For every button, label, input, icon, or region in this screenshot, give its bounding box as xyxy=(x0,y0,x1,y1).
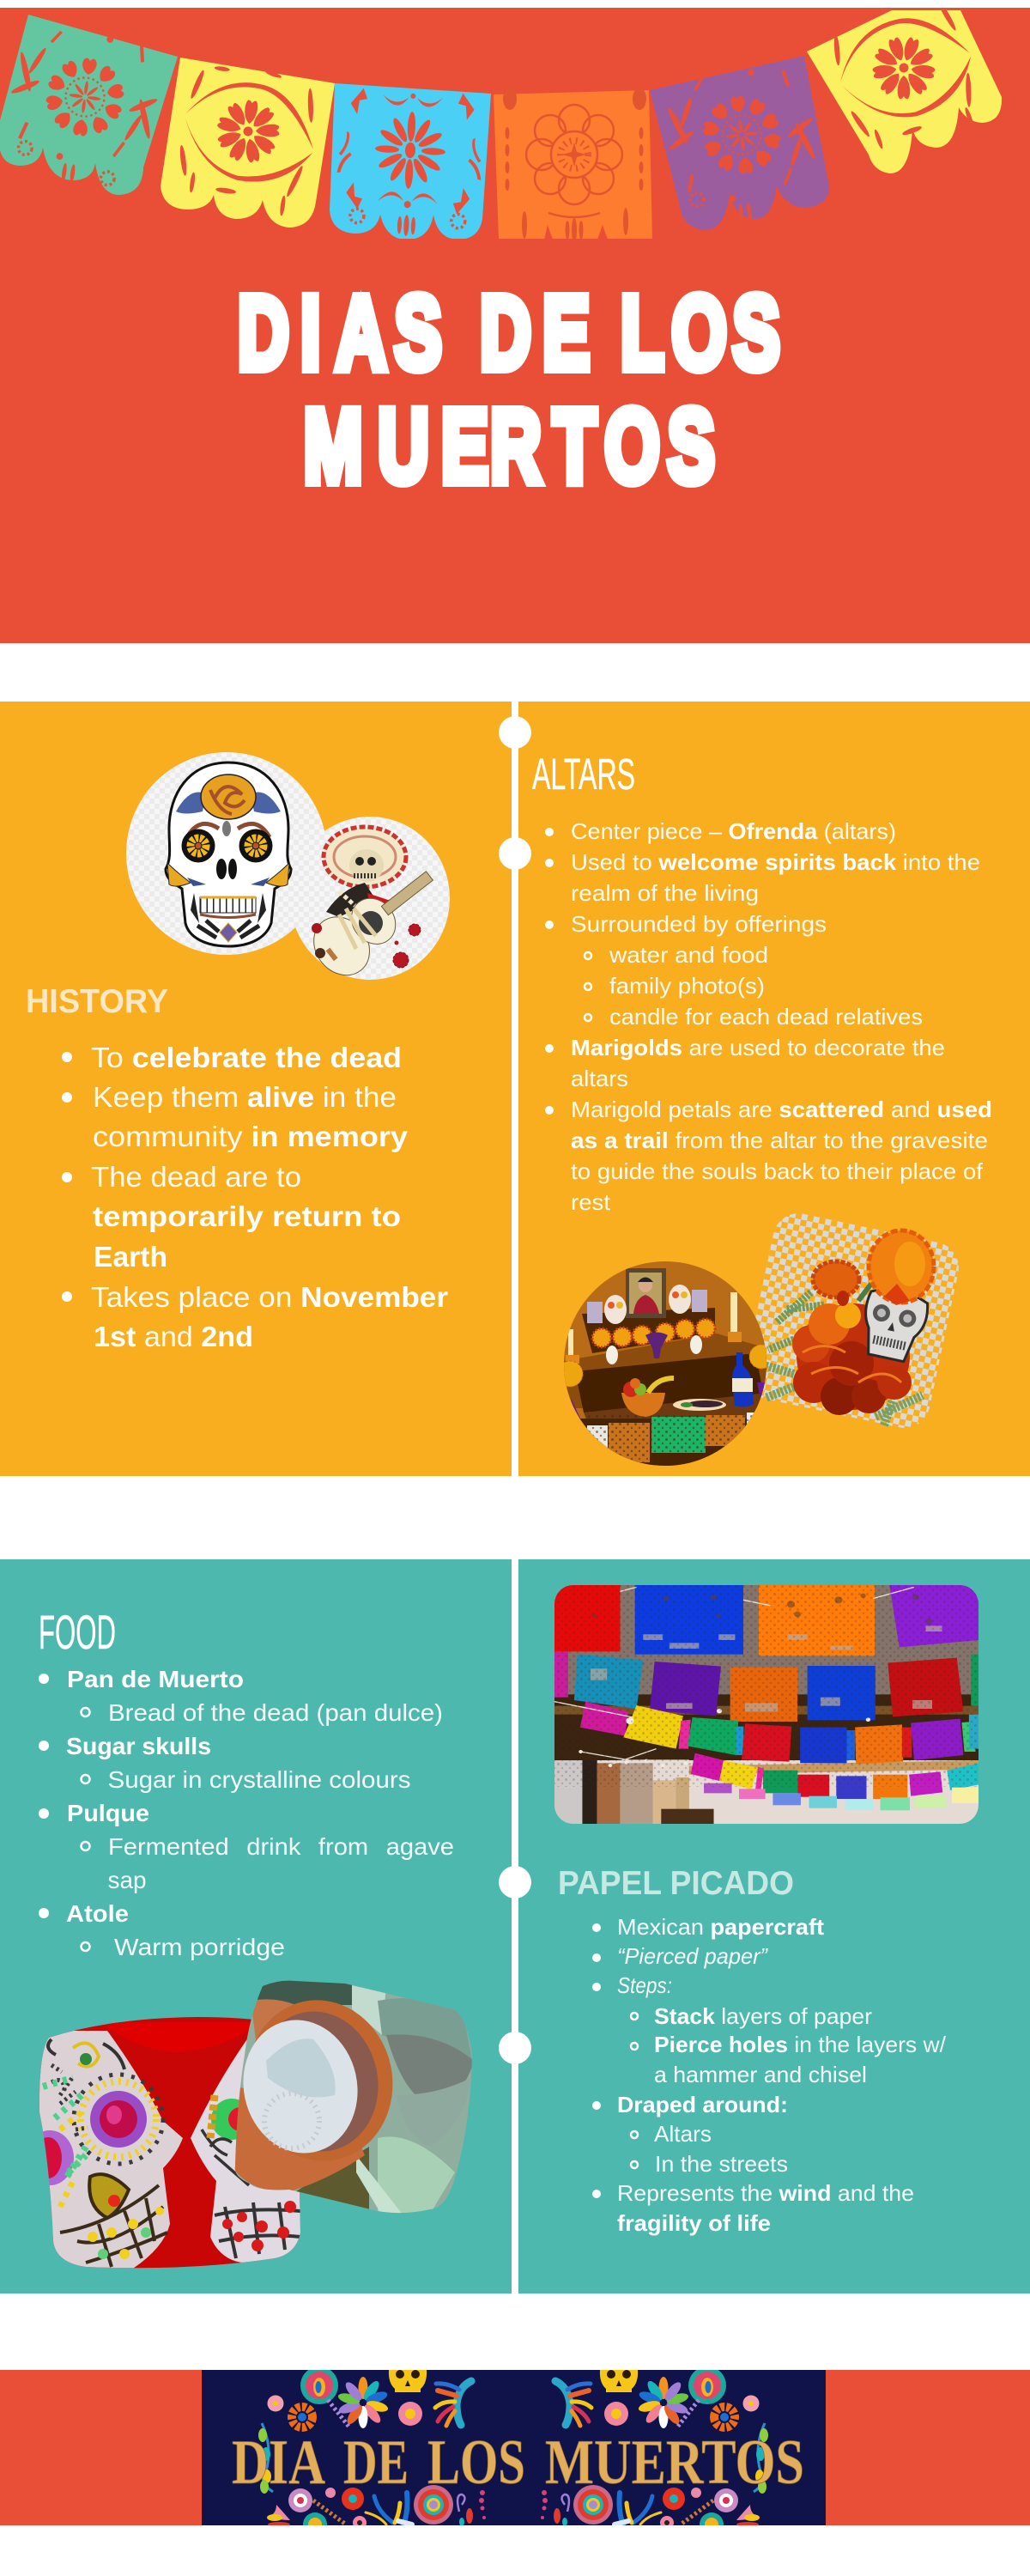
footer band xyxy=(0,2366,1030,2537)
bullet list: papel picado: In the streets xyxy=(655,2151,788,2177)
bullet list: altars: water and food xyxy=(609,942,768,968)
bullet list: history: 1st and 2nd xyxy=(94,1321,253,1352)
footer title: DE xyxy=(343,2427,409,2498)
title: MUERTOS xyxy=(304,387,715,504)
bullet list: papel picado: Represents the wind and the xyxy=(617,2180,914,2206)
image: hanging papel picado photo xyxy=(554,1585,978,1825)
bullet list: papel picado xyxy=(592,1914,947,2236)
bullet list: papel picado: fragility of life xyxy=(617,2210,771,2236)
footer banner image xyxy=(202,2366,826,2537)
image: atole cup photo xyxy=(231,1975,476,2220)
bullet list: food: Warm porridge xyxy=(114,1934,285,1960)
folk art ornaments right xyxy=(541,2366,768,2537)
bullet list: food: sap xyxy=(108,1867,146,1893)
image: sugar skulls photo xyxy=(39,2017,300,2269)
bullet list: history: To celebrate the dead xyxy=(91,1042,402,1073)
bullet list: papel picado: “Pierced paper” xyxy=(617,1943,768,1969)
bullet list: altars: rest xyxy=(571,1189,611,1215)
flag: yellow right xyxy=(807,0,1002,173)
bullet list: altars: Surrounded by offerings xyxy=(571,911,827,937)
bullet list: altars: Marigolds are used to decorate the xyxy=(571,1035,945,1060)
title: DIAS DE LOS xyxy=(238,274,780,391)
flag: yellow xyxy=(161,58,335,228)
bullet list: food xyxy=(39,1666,454,1960)
heading: papel picado: PAPEL PICADO xyxy=(558,1865,794,1902)
footer title: DIA xyxy=(232,2427,325,2498)
bullet list: food: Sugar skulls xyxy=(66,1733,211,1759)
bullet list: history: The dead are to xyxy=(91,1161,301,1193)
image: mariachi skeleton in circle xyxy=(290,817,450,987)
bullet list: papel picado: Altars xyxy=(654,2121,712,2147)
bullet list: history: Keep them alive in the xyxy=(93,1081,397,1113)
bullet list: history: Takes place on November xyxy=(91,1281,448,1313)
bullet list: food: Bread of the dead (pan dulce) xyxy=(108,1699,443,1726)
bullet list: altars: candle for each dead relatives xyxy=(609,1004,923,1030)
panel: food xyxy=(0,1559,512,2293)
footer title: MUERTOS xyxy=(545,2427,804,2498)
footer title: LOS xyxy=(427,2427,525,2498)
bullet list: history: temporarily return to xyxy=(93,1200,401,1232)
bullet list: food: Sugar in crystalline colours xyxy=(108,1766,411,1793)
bullet list: food: Pan de Muerto xyxy=(67,1666,244,1692)
title xyxy=(238,274,780,504)
bullet list: papel picado: Pierce holes in the layers w/ xyxy=(654,2032,947,2057)
bullet list: altars: Marigold petals are scattered and used xyxy=(571,1097,992,1122)
panel: altars xyxy=(518,702,1030,1476)
flag: purple xyxy=(650,56,829,230)
papel picado bunting xyxy=(0,0,1002,242)
heading: history: HISTORY xyxy=(26,983,168,1020)
panel: history xyxy=(0,702,512,1476)
heading: food: FOOD xyxy=(39,1605,116,1659)
image: altar in circle xyxy=(564,1261,766,1466)
header banner xyxy=(0,0,1030,643)
bullet list: papel picado: a hammer and chisel xyxy=(654,2062,867,2087)
bullet list: papel picado: Draped around: xyxy=(617,2092,788,2117)
footer title xyxy=(232,2440,803,2484)
bullet list: food: Atole xyxy=(66,1900,129,1927)
bullet list: history: Earth xyxy=(94,1241,167,1273)
bullet list: papel picado: Stack layers of paper xyxy=(654,2003,872,2029)
bullet list: food: Fermented drink from agave xyxy=(108,1833,454,1860)
folk art ornaments left xyxy=(258,2366,486,2537)
panel: papel picado xyxy=(518,1559,1030,2293)
flag: blue xyxy=(330,83,491,240)
bullet list: history: community in memory xyxy=(93,1121,409,1152)
bullet list: altars: Center piece – Ofrenda (altars) xyxy=(571,818,896,844)
flag: orange xyxy=(494,88,652,242)
bullet list: altars: altars xyxy=(571,1066,628,1091)
image: marigold bouquet tile xyxy=(740,1209,963,1432)
bullet list: papel picado: Mexican papercraft xyxy=(617,1914,824,1940)
bullet list: altars: family photo(s) xyxy=(609,973,765,999)
timeline nodes xyxy=(499,716,531,2064)
bullet list: altars: Used to welcome spirits back into the xyxy=(571,849,980,875)
flag: green xyxy=(0,15,178,195)
image: sugar skull in circle xyxy=(126,752,327,955)
bullet list: history xyxy=(62,1042,448,1352)
bullet list: food: Pulque xyxy=(67,1800,149,1826)
bullet list: altars: as a trail from the altar to the gravesite xyxy=(571,1127,988,1153)
bullet list: altars: to guide the souls back to their place of xyxy=(571,1158,984,1184)
bullet list: altars: realm of the living xyxy=(571,880,759,906)
bullet list: altars xyxy=(545,818,992,1215)
bullet list: papel picado: Steps: xyxy=(617,1972,672,1998)
heading: altars: ALTARS xyxy=(532,750,635,799)
